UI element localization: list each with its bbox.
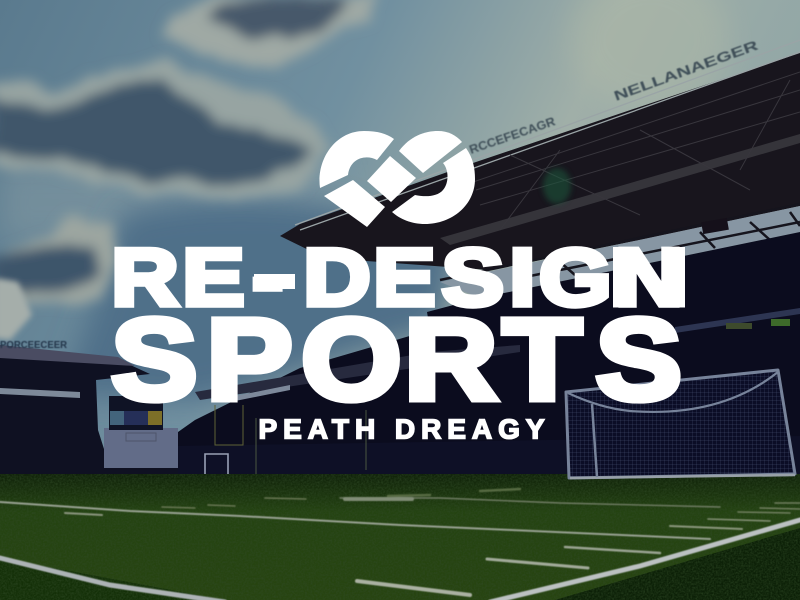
stadium sign: far left: PORCEECEER [0,340,68,351]
scoreboard building [104,396,178,468]
logo emblem [319,131,475,227]
logo: upper right arc [399,131,462,173]
right grandstand roof [280,37,800,270]
lower right stand [170,232,800,480]
left grandstand [0,340,178,476]
logo: upper left arc [319,131,394,188]
logo: lower left diamond [324,180,385,227]
stadium sign: left: RCCEFECAGR [467,114,557,157]
yellow goal post [215,405,243,445]
logo: centre diamond [367,156,416,202]
cloud: large [0,58,335,200]
title: SPORTS: SPORTS [111,294,682,423]
cloud: bright low left [0,278,32,340]
background: sky [0,0,800,480]
small distant goal [205,454,228,476]
pitch [0,474,800,600]
title: RE-DESIGN: RE-DESIGN [111,233,683,323]
pitch markings [0,489,800,600]
background: clouds [0,0,378,340]
subtitle: PEATH DREAGY [258,414,545,444]
stadium sign: right: NELLANAEGER [612,37,760,104]
cloud: top [160,0,378,68]
truss band under roof [440,204,800,298]
goal and net [560,365,800,480]
logo: lower right arc [392,148,475,224]
cloud: lower left [0,215,118,305]
